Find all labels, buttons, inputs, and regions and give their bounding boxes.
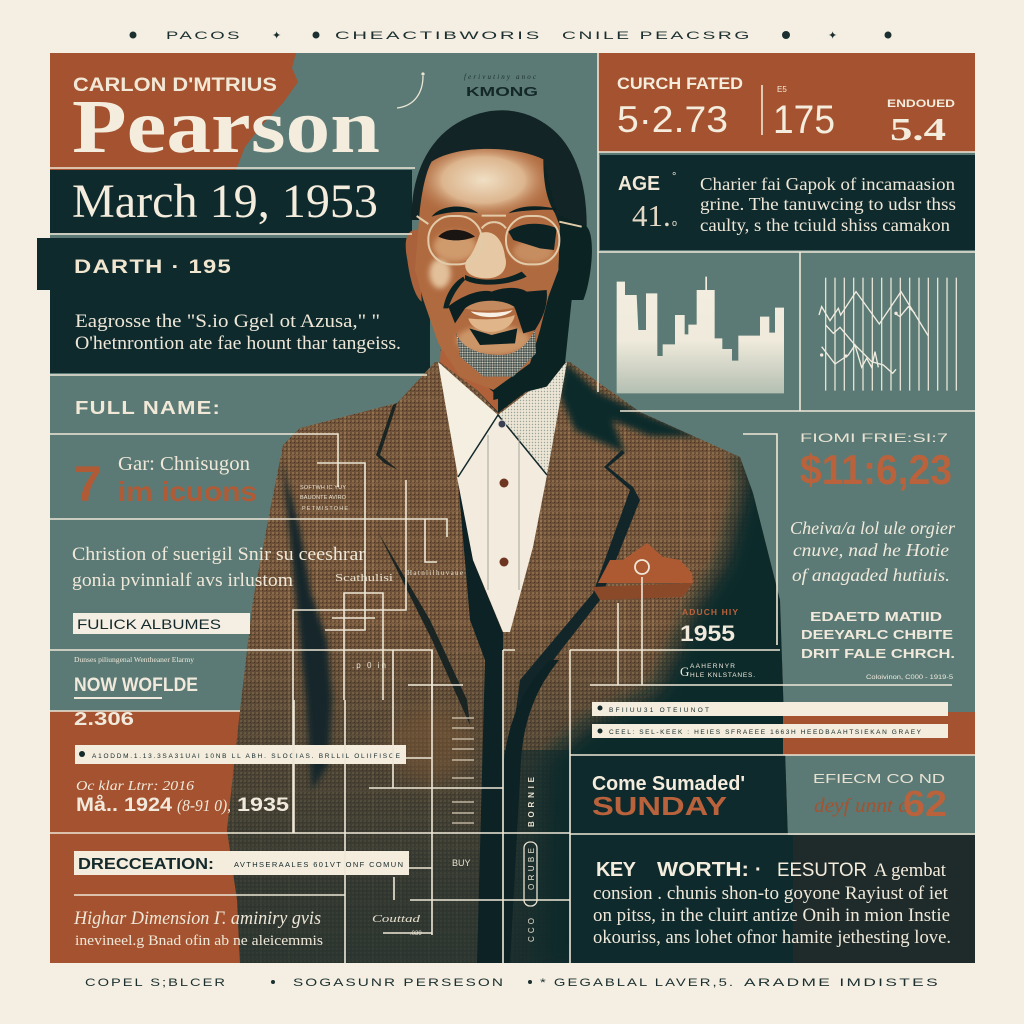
description: Eagrosse the "S.io Ggel ot Azusa," " [75,311,380,332]
key worth body: on pitss, in the cluirt antize Onih in mion Instie [593,905,950,926]
dates: Oc klar Ltrr: 2016 [76,779,194,794]
right curved fold [503,660,559,963]
jacket annotations: BAUONTE AVIRO [300,495,347,501]
church name block [801,609,955,681]
upper lip [465,301,515,311]
quote text: of anagaded hutiuis. [792,565,950,585]
rust right block [783,712,975,755]
panel: come sunday: Come Sumaded' [592,773,745,795]
age description: Charier fai Gapok of incamaasion [700,174,955,194]
christian text block: Christion of suerigil Snir su ceeshrar [72,544,366,565]
panel: stat 62: EFIECM CO ND [813,772,945,786]
icons block [74,453,257,512]
panel: key worth [570,835,975,963]
dedication text [73,908,323,949]
jacket annotations: BUY [452,858,471,868]
age description: grine. The tanuwcing to udsr thss [700,194,956,214]
year callout 1955: ADUCH HIY [682,607,738,617]
jacket annotations [300,485,471,937]
vertical pill labels: BORNIE [527,776,536,827]
age description: caulty, s the tciuld shiss camakon [700,215,950,235]
now worldwide stat [74,675,198,729]
collar button [498,420,506,428]
right collar [498,362,567,475]
stat: 175: E5 [777,85,787,94]
lower lip [468,315,515,332]
church name block: Coloivinon, C000 - 1919-5 [866,674,953,681]
name kicker: CARLON D'MTRIUS [73,75,277,96]
dedication bar [74,851,409,875]
band label: DARTH · 195 [74,257,232,278]
panel: church stats: 175 [773,98,835,142]
left small caption: Dunses piliungenal Wentheaner Elarmy [74,656,195,664]
christian text block: gonia pvinnialf avs irlustom [72,570,293,591]
shirt placket lines [488,435,519,590]
albums label: FULICK ALBUMES [77,616,221,632]
jacket annotations: Couttad [372,914,421,925]
nose underside [465,272,527,285]
icons block: 7 [74,456,102,512]
christian text block [72,544,366,591]
goatee [456,330,536,377]
panel: church stats: 5.4 [890,111,946,147]
pocket square [598,543,693,583]
right lapel edge [512,450,640,740]
panel: stat 62 [813,772,947,824]
bar chart skyline [617,277,784,393]
pocket opening [592,583,693,600]
white detail bar: A1ODDM.1.13.3SA31UAI 10NB LL ABH. SLOCIAS. BRLLIL OLIIFISOE [92,753,401,760]
stat: endoued: ENDOUED [887,98,955,110]
church name block: DRIT FALE CHRCH. [801,646,955,661]
eye right shadow [508,224,557,250]
church name block: EDAETD MATIID [810,609,942,624]
face [418,148,560,390]
header strip: PACOS [166,30,242,42]
cheek crease [443,277,465,308]
white list bars: BFIIUU31 OTEIUNOT [609,707,709,714]
age description [700,174,956,235]
panel: key worth: WORTH: [657,859,749,881]
year callout 1955: AAHERNYR [690,663,735,670]
jacket annotations: .039 [410,931,422,937]
jacket annotations: Hatnlilhuvaue [407,569,463,577]
white list bars: CEEL: SEL-KEEK : HEIES SFRAEEE 1663H HEEDBAAHTSIEKAN GRAEY [609,729,922,736]
key worth body [593,883,951,948]
year callout 1955: 1955 [680,621,735,646]
panel: stat 62: deyf unnt a [814,795,909,817]
now worldwide stat: 2.306 [74,709,134,729]
top centre label: KMONG [466,84,538,99]
hair [412,110,587,237]
eyebrows [432,206,560,217]
header strip [130,30,892,42]
jacket annotations: SOFTWH IC YUY [300,485,346,491]
rust lower-left panel [50,711,260,963]
white detail bar [75,745,406,764]
face shadow and right ear [493,159,592,400]
vertical pill labels: CCO [527,918,536,942]
portrait head [406,110,592,400]
albums label [73,613,250,634]
dates: Må.. 1924 [76,795,172,816]
teeth [471,310,513,317]
panel: church stats [598,53,975,152]
panel: age: 41. [632,198,671,233]
shirt [457,415,547,632]
panel: age [600,155,975,250]
dedication bar: AVTHSERAALES 601VT ONF COMUN [234,860,403,869]
panel: darth band and description [37,238,437,373]
panel: church stats: 5·2.73 [617,99,728,140]
full name label: FULL NAME: [75,398,221,418]
centre dark opening [458,480,503,963]
year callout 1955: HLE KNLSTANES. [690,672,755,679]
moustache [448,288,547,333]
header strip: CHEACTIBWORIS [335,30,542,42]
panel: birth date: March 19, 1953 [72,175,378,228]
figure tick marks [452,718,474,823]
panel: stat 62: 62 [903,783,947,824]
panel: come sunday [570,756,785,834]
footer strip: * GEGABLAL LAVER,5. [540,977,735,989]
icons block: Gar: Chnisugon [118,453,250,475]
quote text: Cheiva/a lol ule orgier [790,518,956,538]
white list bars [592,702,948,738]
nose [465,232,506,278]
stat: church fated: CURCH FATED [617,74,743,93]
key worth body: consion . chunis shon-to goyone Rayiust of iet [593,883,949,904]
year callout 1955 [680,607,755,679]
panel: key worth: A gembat [874,860,947,881]
eye left [438,230,475,240]
church name block: DEEYARLC CHBITE [801,627,953,642]
jacket annotations: PETMISTOHE [302,506,348,512]
vertical pill labels [524,776,537,942]
vertical pill labels: ORUBE [527,848,536,890]
jacket annotations: .p 0 in [352,661,386,670]
footer strip: ARADME IMDISTES [744,977,940,989]
dates: (8-91 0), [177,796,231,815]
header strip: ✦ [272,30,283,42]
collar edges [458,415,547,477]
panel: age: AGE [618,173,660,195]
top centre label: ferivutiny anoc [464,73,537,81]
panel: come sunday: SUNDAY [592,791,727,821]
glasses [417,216,582,264]
now worldwide stat: NOW WOFLDE [74,675,198,696]
surname: Pearson [72,85,380,169]
left lapel edge [376,403,470,725]
description [75,311,401,354]
footer strip: COPEL S;BLCER [85,977,227,989]
header strip: ✦ [828,30,839,42]
panel: age: ° [672,171,676,183]
neck shadow [440,300,565,413]
panel: key worth: KEY [596,859,637,881]
dedication text: inevineel.g Bnad ofin ab ne aleicemmis [75,933,323,949]
soul patch [469,328,517,345]
panel: age: o [672,218,677,228]
dedication bar: DRECCEATION: [78,856,214,873]
top centre label [397,72,538,108]
fundraising figure: $11:6,23 [800,446,952,493]
panel: key worth: · [755,859,762,881]
shirt buttons [500,478,508,566]
header strip: CNILE PEACSRG [562,30,752,42]
icons block: im icuons [118,476,257,507]
dedication text: Highar Dimension Γ. aminiry gvis [73,908,321,929]
pocket circle marker [635,560,649,574]
panel: name heading on rust [50,53,380,170]
panel: key worth: EESUTOR [777,860,867,881]
quote text [790,518,956,585]
footer strip: SOGASUNR PERSESON [293,977,505,989]
figure: man in tweed jacket [220,300,810,970]
jacket annotations: Scathulisi [335,572,393,584]
year callout 1955: G [680,664,689,679]
line chart [819,278,956,391]
key worth body: okouriss, ans lohet ofnor hamite jethesting love. [593,927,951,948]
dates [76,779,290,816]
dates: 1935 [237,795,290,816]
description: O'hetnrontion ate fae hount thar tangeiss. [75,333,401,354]
jacket body [220,355,810,970]
neck skin [440,345,498,412]
left ear [406,230,422,302]
quote text: cnuve, nad he Hotie [793,540,949,560]
fundraising figure: FIOMI FRIE:SI:7 [800,431,949,445]
left collar [438,362,498,477]
footer strip [85,977,940,989]
